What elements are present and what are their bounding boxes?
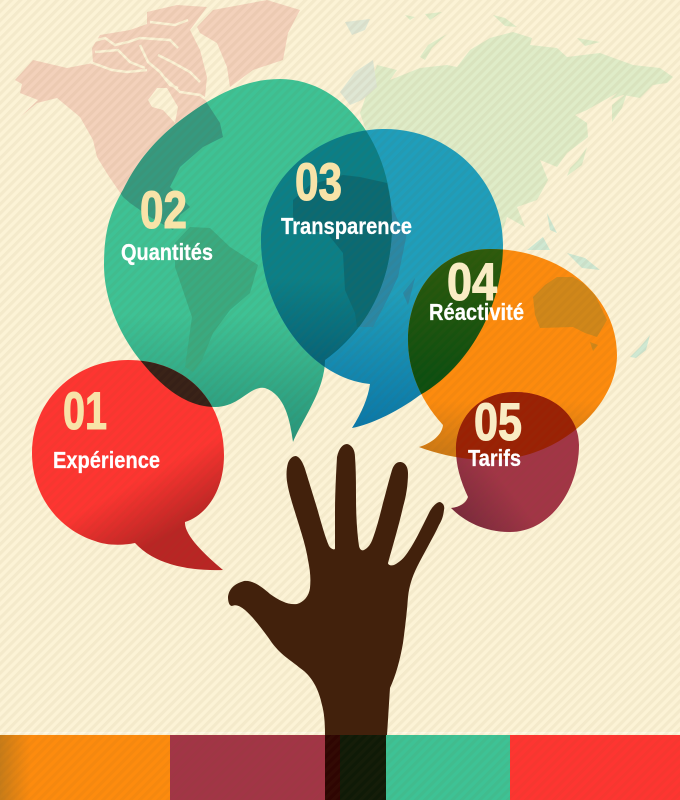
map: Arctic channels xyxy=(90,20,207,100)
map: Scandinavia and Iceland xyxy=(340,19,377,105)
number 05: 05 xyxy=(474,393,522,452)
number 03: 03 xyxy=(295,153,342,212)
label Tarifs: Tarifs xyxy=(468,445,521,471)
number 02: 02 xyxy=(140,181,187,240)
Africa in overlap xyxy=(293,175,392,327)
map: Hudson Bay xyxy=(148,88,178,123)
labels xyxy=(53,153,524,473)
South America seen through bubble xyxy=(175,227,258,372)
bubble 02: green xyxy=(104,79,366,442)
overlap of bubbles 01 and 02 xyxy=(140,360,212,407)
bubble 03: blue xyxy=(261,129,503,428)
map: Eurasia xyxy=(360,32,673,240)
map: South-East Asia and New Zealand xyxy=(527,213,650,358)
North America seen through bubble xyxy=(120,102,223,230)
label Quantités: Quantités xyxy=(121,239,213,265)
bubble 05: burgundy xyxy=(451,392,579,532)
orange segment xyxy=(0,735,170,800)
world map xyxy=(15,0,673,358)
overlap of bubbles 03 and 04 xyxy=(408,249,503,394)
Australia seen through bubble xyxy=(533,277,607,351)
bottom colour bar xyxy=(0,732,680,800)
dark green segment xyxy=(340,735,386,800)
burgundy segment xyxy=(170,735,325,800)
label Transparence: Transparence xyxy=(281,213,412,239)
number 04: 04 xyxy=(447,253,497,312)
map: North America and Greenland xyxy=(15,0,300,230)
bubble 04: orange xyxy=(408,249,617,460)
red segment xyxy=(510,735,680,800)
dark red segment xyxy=(325,735,340,800)
map: arctic islands and east Asian islands xyxy=(405,12,627,176)
bubble 01: red xyxy=(32,360,224,570)
overlap of bubbles 04 and 05 xyxy=(456,392,576,460)
label Réactivité: Réactivité xyxy=(429,299,524,325)
number 01: 01 xyxy=(63,382,107,441)
Madagascar xyxy=(403,278,415,305)
label Expérience: Expérience xyxy=(53,447,160,473)
Africa seen through blue bubble xyxy=(359,200,406,327)
icon: raised hand xyxy=(228,444,444,735)
green segment xyxy=(386,735,510,800)
overlap of bubbles 02 and 03 xyxy=(261,130,392,367)
